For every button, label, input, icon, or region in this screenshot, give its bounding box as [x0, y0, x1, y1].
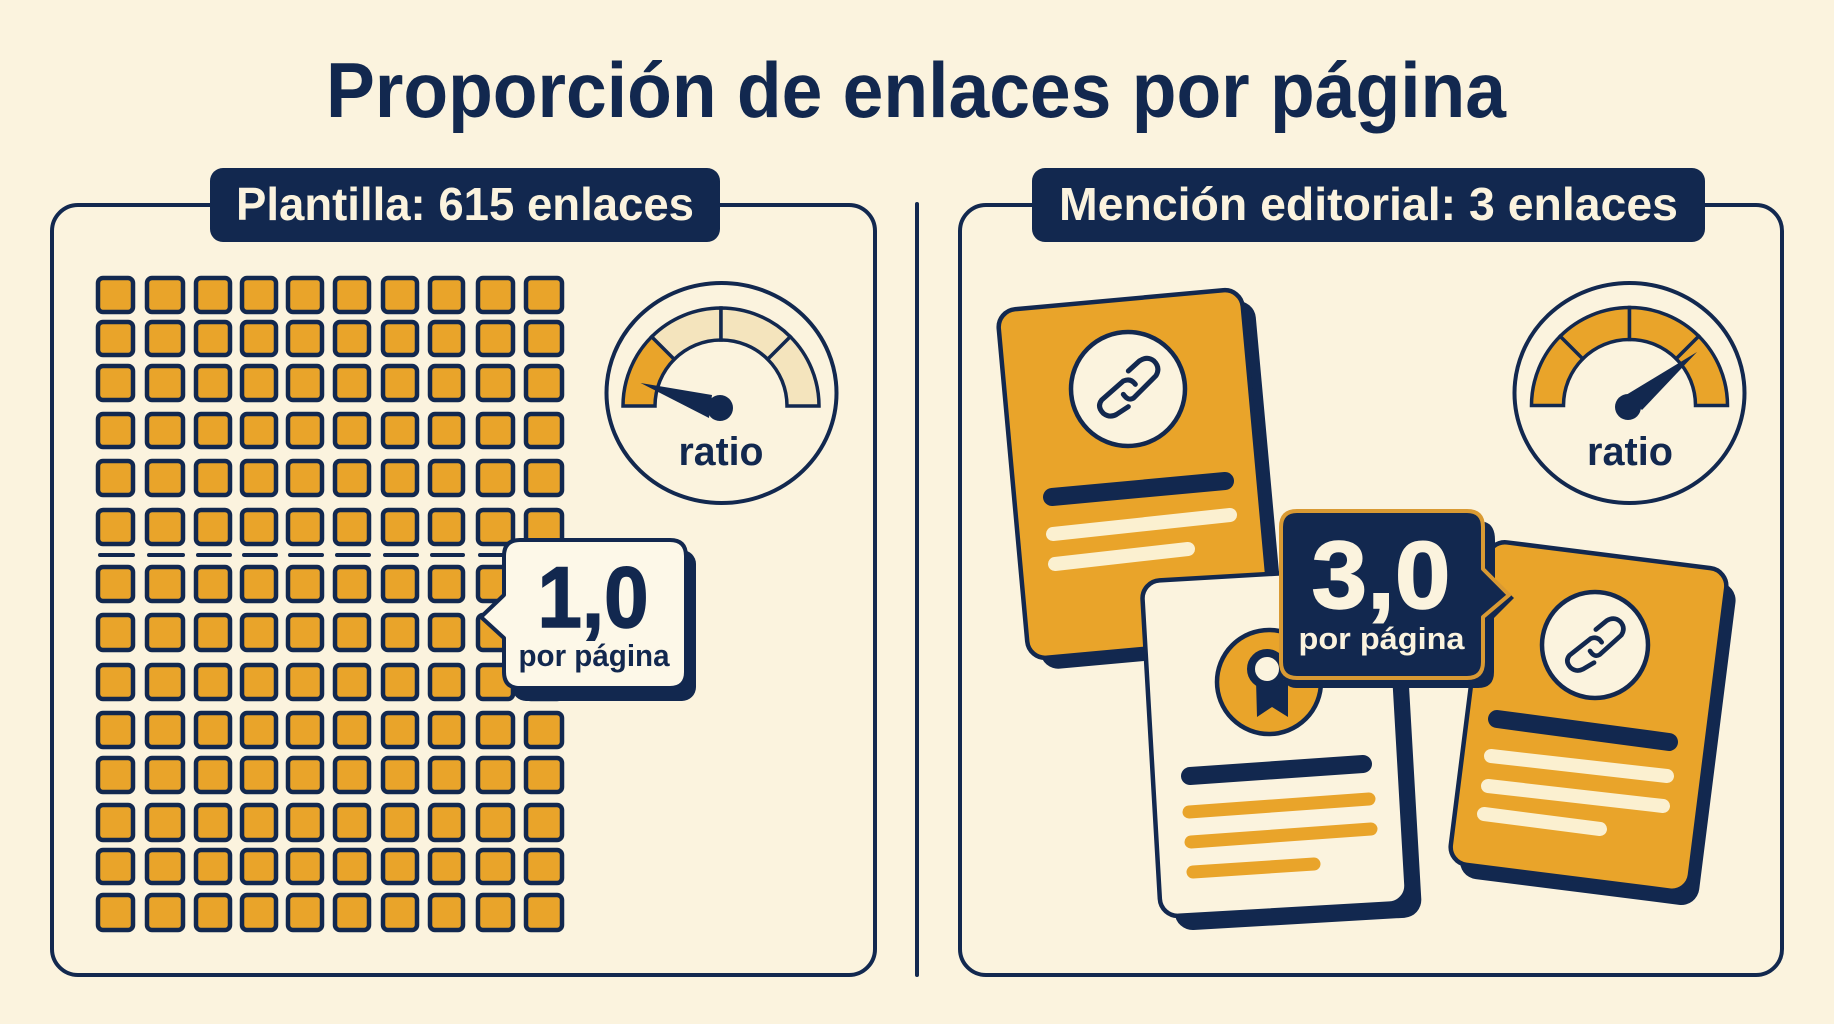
heading: plantilla	[210, 168, 720, 242]
chart: grid of link squares	[98, 278, 562, 930]
icon: award medal	[1217, 630, 1321, 734]
divider	[915, 202, 919, 977]
icon: gauge needle high	[1615, 352, 1697, 420]
gauge label: ratio	[1587, 430, 1673, 474]
document card: top left	[997, 289, 1286, 670]
heading: mención editorial	[1032, 168, 1705, 242]
heading: plantilla: Plantilla: 615 enlaces	[236, 178, 694, 230]
gauge: low ratio	[606, 283, 836, 503]
gauge label: ratio	[678, 430, 764, 474]
panel: mención editorial	[960, 168, 1782, 975]
document card: right	[1449, 540, 1738, 907]
document card: center with medal	[1142, 567, 1422, 931]
callout: 3,0 por página	[1281, 511, 1514, 688]
callout: 3,0 por página: 3,0	[1312, 522, 1450, 629]
gauge: high ratio	[1514, 283, 1744, 503]
icon: gauge needle low	[641, 383, 733, 421]
heading: mención editorial: Mención editorial: 3 enlaces	[1059, 178, 1678, 230]
callout: 1,0 por página	[481, 540, 696, 701]
callout: 1,0 por página: por página	[518, 638, 670, 673]
title: Proporción de enlaces por página	[326, 46, 1507, 134]
icon: link badge	[1071, 332, 1185, 446]
panel: plantilla	[52, 168, 875, 975]
icon: link badge	[1542, 592, 1648, 698]
callout: 3,0 por página: por página	[1298, 621, 1465, 656]
callout: 1,0 por página: 1,0	[538, 550, 648, 646]
